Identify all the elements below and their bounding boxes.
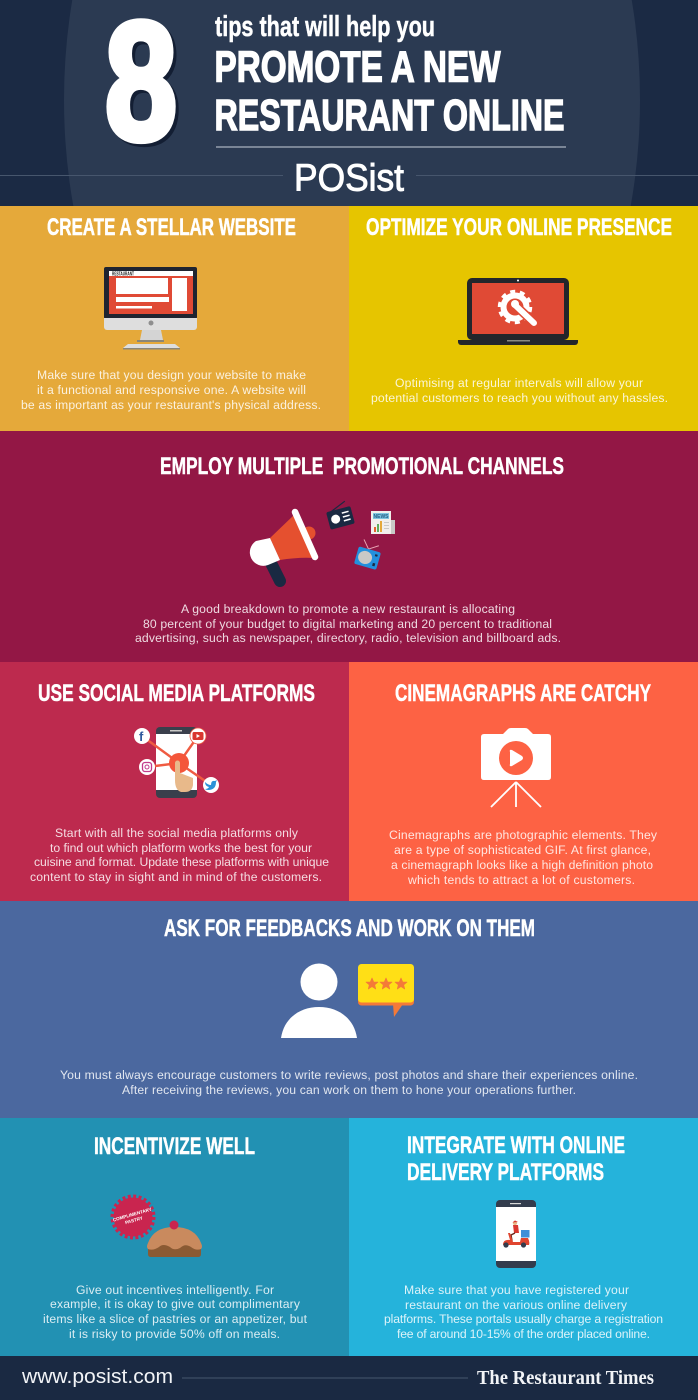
text block: Make sure that you design your website to make <box>37 368 306 382</box>
title <box>214 11 564 140</box>
heading: DELIVERY PLATFORMS <box>407 1159 604 1186</box>
text block: it a functional and responsive one. A website will <box>37 383 306 397</box>
text block: Make sure that you have registered your <box>404 1283 629 1297</box>
icon: laptop with wrench and gear <box>458 278 578 345</box>
panel: use social media platforms <box>0 662 349 901</box>
text block <box>371 376 668 405</box>
icon: phone with social network links <box>134 727 219 798</box>
text block: restaurant on the various online delivery <box>405 1298 628 1312</box>
icon: desktop monitor: RESTAURANT <box>112 272 134 278</box>
panel: ask for feedbacks <box>0 901 698 1118</box>
the restaurant times logo: The Restaurant Times <box>477 1367 654 1389</box>
icon: desktop monitor <box>104 267 197 350</box>
text block: advertising, such as newspaper, directory, radio, television and billboard ads. <box>135 631 561 645</box>
icon: megaphone <box>250 512 316 581</box>
text block: a cinemagraph looks like a high definition photo <box>391 858 653 872</box>
heading <box>407 1132 625 1186</box>
panel: optimize your online presence <box>349 206 698 431</box>
text block: to find out which platform works the best for your <box>50 841 312 855</box>
icon: radio <box>325 500 355 530</box>
icon: customer silhouette <box>281 964 357 1038</box>
website url: www.posist.com <box>21 1366 173 1388</box>
text block: example, it is okay to give out complimentary <box>50 1297 301 1311</box>
heading: CREATE A STELLAR WEBSITE <box>47 214 296 241</box>
icon: complimentary pastry badge: COMPLIMENTARY <box>112 1207 152 1223</box>
text block: Start with all the social media platforms only <box>55 826 299 840</box>
icon: phone with delivery scooter <box>496 1200 536 1268</box>
text block <box>30 826 329 884</box>
text block: 80 percent of your budget to digital marketing and 20 percent to traditional <box>143 617 552 631</box>
text block <box>21 368 321 412</box>
text block: You must always encourage customers to write reviews, post photos and share their experiences online. <box>60 1068 638 1082</box>
icon: twitter <box>203 777 219 793</box>
icon: newspaper <box>371 511 395 534</box>
icon: complimentary pastry badge <box>112 1196 154 1238</box>
title: tips that will help you <box>215 11 435 43</box>
text block: A good breakdown to promote a new restaurant is allocating <box>181 602 515 616</box>
text block: content to stay in sight and in mind of the customers. <box>30 870 322 884</box>
text block: After receiving the reviews, you can work on them to hone your operations further. <box>122 1083 576 1097</box>
icon: star rating speech bubble <box>358 964 414 1017</box>
icon: camera on tripod <box>481 728 551 807</box>
text block: platforms. These portals usually charge a registration <box>384 1312 663 1326</box>
text block: be as important as your restaurant's physical address. <box>21 398 321 412</box>
header banner <box>0 0 698 206</box>
panel: employ multiple promotional channels <box>0 431 698 662</box>
heading: USE SOCIAL MEDIA PLATFORMS <box>38 680 315 707</box>
text block: Optimising at regular intervals will allow your <box>395 376 643 390</box>
text block: fee of around 10-15% of the order placed online. <box>397 1327 650 1341</box>
icon: pastry <box>147 1220 202 1257</box>
icon: instagram <box>139 759 155 775</box>
text block: potential customers to reach you without any hassles. <box>371 391 668 405</box>
text block: Give out incentives intelligently. For <box>76 1283 274 1297</box>
footer <box>0 1356 698 1400</box>
text block: it is risky to provide 50% off on meals. <box>69 1327 280 1341</box>
icon: television <box>354 539 383 570</box>
icon: complimentary pastry badge: PASTRY <box>125 1215 143 1225</box>
panel: integrate with delivery platforms <box>349 1118 698 1356</box>
text block <box>43 1283 308 1341</box>
icon: newspaper: NEWS <box>374 514 389 520</box>
text block: Cinemagraphs are photographic elements. They <box>389 828 658 842</box>
heading: ASK FOR FEEDBACKS AND WORK ON THEM <box>164 915 535 942</box>
heading: INCENTIVIZE WELL <box>94 1133 255 1160</box>
panel: incentivize well <box>0 1118 349 1356</box>
icon: facebook: f <box>139 729 144 744</box>
text block: which tends to attract a lot of customers. <box>407 873 635 887</box>
POSist logo: POSist <box>294 158 404 200</box>
text block: items like a slice of pastries or an appetizer, but <box>43 1312 308 1326</box>
text block <box>60 1068 638 1097</box>
text block <box>384 1283 663 1341</box>
title: RESTAURANT ONLINE <box>214 91 564 140</box>
title: PROMOTE A NEW <box>214 42 501 92</box>
text block <box>135 602 561 645</box>
icon: youtube <box>190 728 206 744</box>
text block: cuisine and format. Update these platforms with unique <box>34 855 329 869</box>
text block: are a type of sophisticated GIF. At first glance, <box>394 843 651 857</box>
panel: create a stellar website <box>0 206 349 431</box>
panel: cinemagraphs are catchy <box>349 662 698 901</box>
text block <box>389 828 658 887</box>
